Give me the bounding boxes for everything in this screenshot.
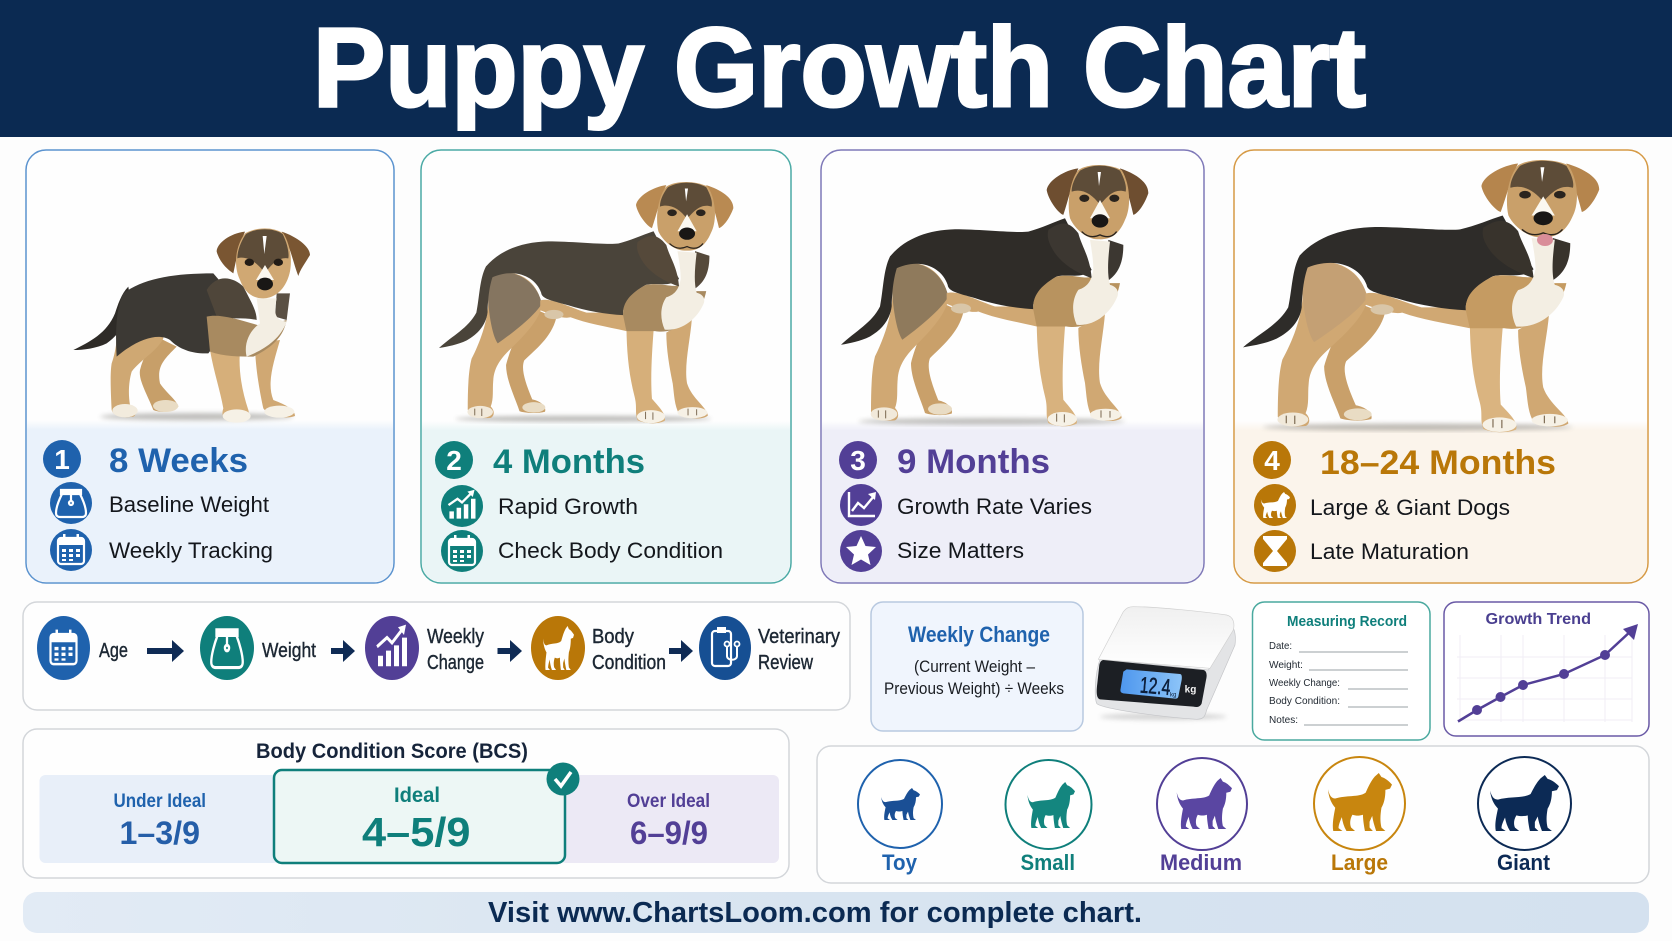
- number badge 2: [435, 441, 473, 479]
- panel: weekly change formula: [871, 602, 1083, 731]
- size: small: Small: [1020, 850, 1075, 875]
- under ideal block: Under Ideal: [114, 791, 206, 812]
- digital scale: 12.4: [1139, 671, 1172, 700]
- arrow: [669, 640, 693, 662]
- formula text: Previous Weight) ÷ Weeks: [884, 679, 1064, 698]
- size: small: [1006, 760, 1092, 875]
- number badge 1: [43, 440, 81, 478]
- heading: 9 months: 9 Months: [897, 443, 1050, 481]
- record fields: [1269, 641, 1408, 726]
- panel: 18-24 months: [1234, 150, 1648, 583]
- digital scale: kg: [1185, 685, 1196, 696]
- ideal block: [274, 770, 565, 863]
- icon: line chart: [840, 484, 882, 526]
- size: toy: [858, 760, 942, 875]
- text: late maturation: Late Maturation: [1310, 539, 1469, 564]
- under ideal block: [40, 775, 280, 863]
- dog illustration: 9 months: [841, 165, 1148, 427]
- over ideal block: 6–9/9: [630, 815, 708, 851]
- label: body condition: Body: [592, 626, 634, 648]
- dog illustration: 18-24 months: [1243, 160, 1600, 433]
- ideal block: Ideal: [394, 784, 440, 807]
- label: weekly change: Weekly: [427, 626, 484, 648]
- text: large and giant dogs: Large & Giant Dogs: [1310, 495, 1510, 520]
- label: veterinary review: Review: [758, 652, 813, 674]
- number badge 2: 2: [446, 445, 462, 476]
- record fields: Date:: [1269, 641, 1292, 652]
- icon: hourglass: [1254, 530, 1296, 572]
- record title: Measuring Record: [1287, 613, 1407, 630]
- title banner: [0, 0, 1672, 137]
- label: weight: Weight: [262, 640, 316, 662]
- check badge: [546, 762, 580, 796]
- title banner: Puppy Growth Chart: [313, 5, 1366, 130]
- icon: growth bars: [441, 485, 483, 527]
- label: age: Age: [99, 640, 128, 662]
- size: giant: [1478, 757, 1571, 875]
- icon: scale: [50, 482, 92, 524]
- text: rapid growth: Rapid Growth: [498, 494, 638, 519]
- footer banner: Visit www.ChartsLoom.com for complete chart.: [488, 897, 1142, 929]
- label: veterinary review: Veterinary: [758, 626, 840, 648]
- heading: 18-24 months: 18–24 Months: [1320, 444, 1556, 482]
- dog illustration: 4 months: [439, 182, 734, 424]
- trend title: Growth Trend: [1486, 611, 1591, 628]
- size: large: [1314, 757, 1405, 875]
- panel: measuring workflow: [23, 602, 850, 710]
- footer banner: [23, 892, 1649, 933]
- number badge 4: 4: [1264, 445, 1280, 476]
- text: baseline weight: Baseline Weight: [109, 492, 269, 517]
- icon: check calendar: [441, 530, 483, 572]
- label: body condition: [592, 626, 666, 674]
- text: size matters: Size Matters: [897, 538, 1024, 563]
- number badge 4: [1253, 441, 1291, 479]
- label: weekly change: [427, 626, 484, 674]
- icon: calendar: [50, 529, 92, 571]
- icon: age calendar: [37, 616, 90, 680]
- icon: veterinary review: [699, 616, 751, 680]
- panel: 4 months: [421, 150, 791, 583]
- BCS title: Body Condition Score (BCS): [256, 740, 528, 763]
- size: large: Large: [1331, 850, 1388, 875]
- record fields: Weight:: [1269, 660, 1303, 671]
- label: body condition: Condition: [592, 652, 666, 674]
- panel: measuring record: [1252, 602, 1430, 740]
- over ideal block: [560, 775, 779, 863]
- digital scale: kg: [1170, 693, 1176, 699]
- record fields: Body Condition:: [1269, 696, 1340, 707]
- panel: 8 weeks: [26, 150, 394, 583]
- panel: 9 months: [821, 150, 1204, 583]
- number badge 1: 1: [54, 444, 70, 475]
- number badge 3: [839, 441, 877, 479]
- icon: dog: [1254, 484, 1296, 526]
- text: growth rate varies: Growth Rate Varies: [897, 494, 1092, 519]
- size: toy: Toy: [882, 850, 918, 875]
- formula heading: Weekly Change: [908, 622, 1050, 647]
- number badge 3: 3: [850, 445, 866, 476]
- size: giant: Giant: [1497, 850, 1551, 875]
- digital scale: [1095, 607, 1235, 720]
- arrow: [498, 640, 522, 662]
- icon: star: [840, 530, 882, 572]
- text: check body condition: Check Body Condition: [498, 538, 723, 563]
- puppy illustration: [73, 228, 310, 423]
- panel: dog sizes: [817, 746, 1649, 883]
- icon: body condition: [531, 616, 585, 680]
- panel: body condition score: [23, 729, 789, 878]
- size: medium: [1157, 758, 1247, 875]
- record fields: Weekly Change:: [1269, 678, 1340, 689]
- text: weekly tracking: Weekly Tracking: [109, 538, 273, 563]
- icon: weekly change: [365, 616, 419, 680]
- trend line with arrow: [1458, 624, 1638, 722]
- record fields: Notes:: [1269, 715, 1298, 726]
- arrow: [331, 640, 355, 662]
- label: veterinary review: [758, 626, 840, 674]
- icon: weight scale: [200, 616, 254, 680]
- over ideal block: Over Ideal: [627, 791, 710, 812]
- heading: 4 months: 4 Months: [493, 443, 645, 481]
- formula text: (Current Weight –: [914, 657, 1035, 676]
- under ideal block: 1–3/9: [120, 815, 200, 851]
- heading: 8 weeks: 8 Weeks: [109, 442, 248, 480]
- panel: growth trend: [1444, 602, 1649, 736]
- formula text: [884, 657, 1064, 698]
- arrow: [147, 640, 184, 662]
- label: weekly change: Change: [427, 652, 484, 674]
- ideal block: 4–5/9: [362, 809, 470, 855]
- size: medium: Medium: [1160, 850, 1242, 875]
